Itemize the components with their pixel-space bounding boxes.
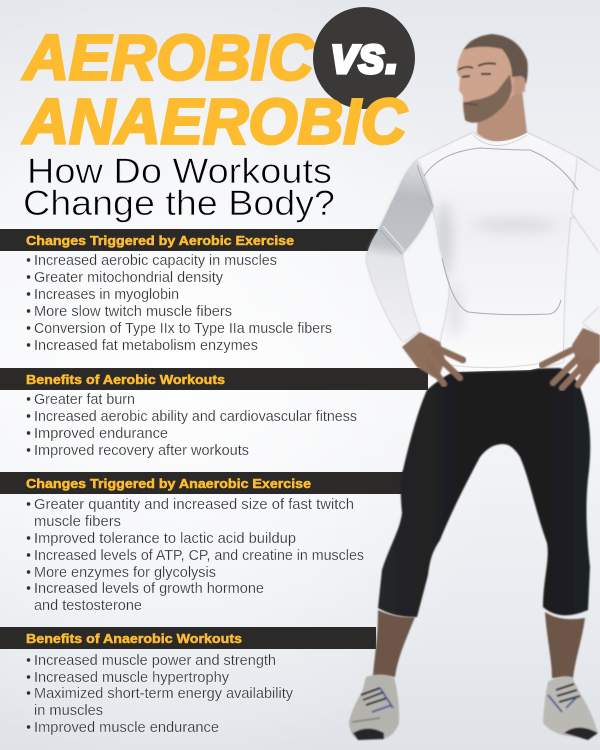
list: Increased muscle power and strength: [34, 653, 276, 669]
list: •: [26, 565, 31, 581]
subtitle: [23, 152, 335, 223]
list: •: [26, 581, 31, 597]
right shoe: [543, 676, 598, 740]
list: •: [26, 409, 31, 425]
list: •: [26, 253, 31, 269]
shirt seams: [380, 135, 578, 368]
list: Increased muscle hypertrophy: [34, 670, 230, 686]
list: •: [26, 720, 31, 736]
list: •: [26, 670, 31, 686]
list: Increased levels of growth hormone: [34, 581, 264, 597]
right hand: [542, 328, 600, 388]
list: Increases in myoglobin: [34, 287, 179, 303]
left hand: [402, 332, 463, 384]
list: •: [26, 497, 31, 513]
list: •: [26, 686, 31, 702]
heading: Changes Triggered by Anaerobic Exercise: [26, 476, 311, 491]
title: aerobic: AEROBIC: [22, 22, 314, 94]
subtitle: Change the Body?: [23, 184, 335, 223]
panel: changes triggered by aerobic exercise: [26, 233, 332, 354]
list: •: [26, 321, 31, 337]
panel: benefits of aerobic workouts: [26, 372, 357, 459]
list: •: [26, 270, 31, 286]
list: Increased aerobic capacity in muscles: [34, 253, 277, 269]
neck: [477, 90, 527, 142]
heading: Benefits of Aerobic Workouts: [26, 372, 225, 387]
list: Greater fat burn: [34, 392, 135, 408]
list: •: [26, 443, 31, 459]
left shoe: [349, 674, 399, 740]
list: More slow twitch muscle fibers: [34, 304, 232, 320]
list: Increased levels of ATP, CP, and creatine in muscles: [34, 548, 364, 564]
list: Greater quantity and increased size of fast twitch: [34, 497, 354, 513]
vs badge: [313, 7, 415, 109]
right upper arm: [572, 158, 600, 253]
list: Improved recovery after workouts: [34, 443, 249, 459]
list: •: [26, 548, 31, 564]
list: •: [26, 287, 31, 303]
section bars: [0, 229, 428, 649]
list: Conversion of Type IIx to Type IIa muscle fibers: [34, 321, 332, 337]
list: Increased aerobic ability and cardiovascular fitness: [34, 409, 357, 425]
list: •: [26, 338, 31, 354]
heading: Benefits of Anaerobic Workouts: [26, 631, 242, 646]
list: [26, 392, 357, 459]
left arm: [367, 160, 433, 342]
panel: changes triggered by anaerobic exercise: [26, 476, 364, 614]
right forearm: [583, 307, 600, 335]
list: Maximized short-term energy availability: [34, 686, 294, 702]
list: •: [26, 653, 31, 669]
list: [26, 497, 364, 614]
list: Improved endurance: [34, 426, 168, 442]
list: and testosterone: [34, 598, 142, 614]
panel: benefits of anaerobic workouts: [26, 631, 294, 736]
black tights: [378, 368, 590, 617]
list: Greater mitochondrial density: [34, 270, 224, 286]
list: •: [26, 531, 31, 547]
list: Increased fat metabolism enzymes: [34, 338, 258, 354]
list: Improved muscle endurance: [34, 720, 219, 736]
shirt shading: [436, 202, 557, 338]
list: muscle fibers: [34, 514, 121, 530]
subtitle: How Do Workouts: [27, 152, 332, 191]
list: [26, 253, 332, 354]
list: Improved tolerance to lactic acid buildup: [34, 531, 296, 547]
figure: man in white shirt and black tights: [349, 34, 600, 740]
list: [26, 653, 294, 736]
list: •: [26, 304, 31, 320]
list: in muscles: [34, 703, 103, 719]
vs badge: vs.: [331, 27, 399, 85]
list: More enzymes for glycolysis: [34, 565, 216, 581]
head: [457, 34, 528, 123]
heading: Changes Triggered by Aerobic Exercise: [26, 233, 294, 248]
list: •: [26, 426, 31, 442]
title: anaerobic: ANAEROBIC: [22, 86, 407, 158]
list: •: [26, 392, 31, 408]
white shirt torso: [417, 133, 587, 372]
calves: [373, 610, 585, 678]
